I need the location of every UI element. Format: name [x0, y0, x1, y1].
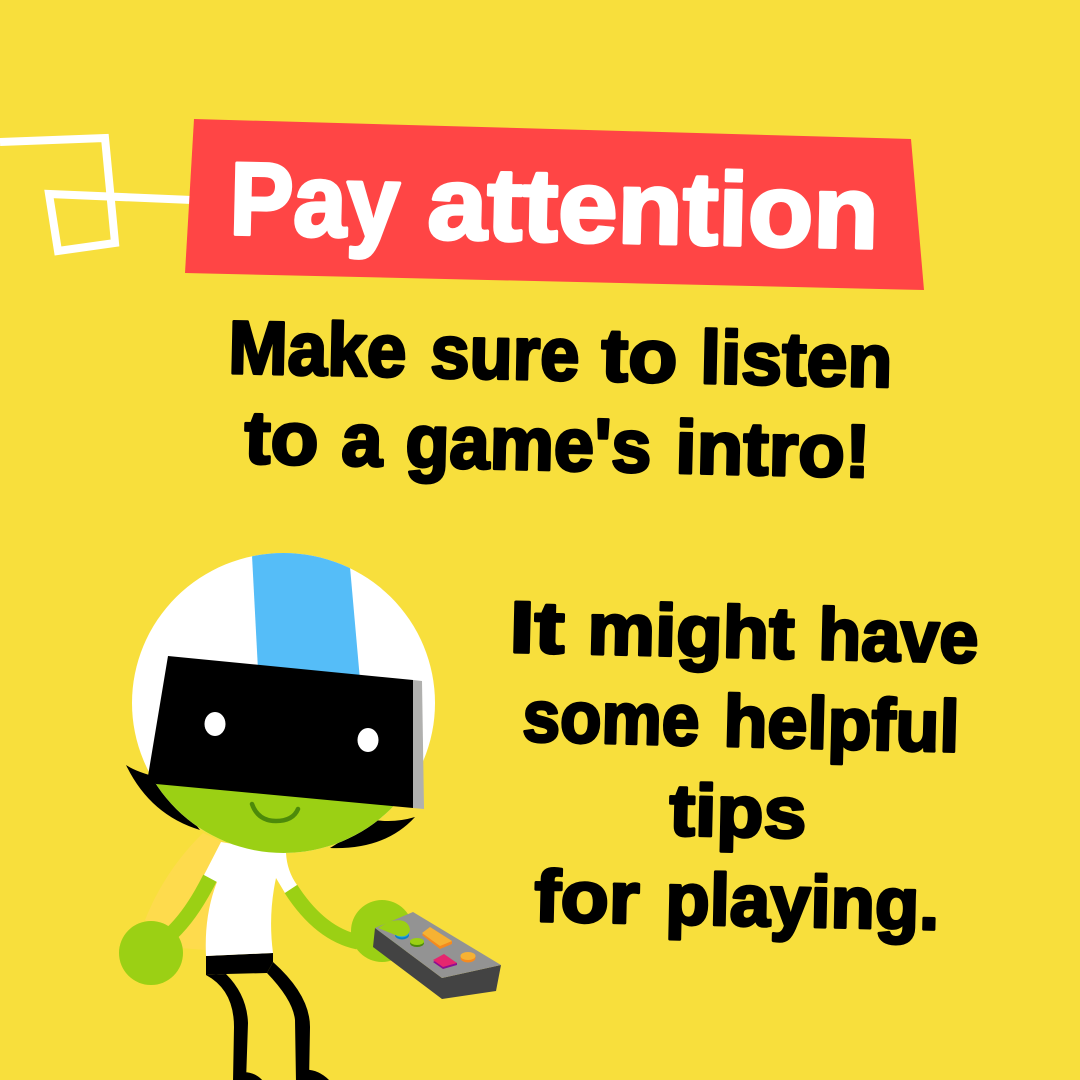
visor edge	[413, 680, 424, 809]
text block: helpful tips: have	[818, 594, 979, 679]
shirt	[204, 842, 297, 956]
title banner	[185, 119, 924, 290]
text block: listen to intro: Make	[228, 305, 407, 393]
text block: helpful tips: some	[522, 676, 701, 761]
character illustration	[119, 552, 501, 1080]
face	[156, 784, 394, 853]
text block: helpful tips: for	[534, 856, 640, 939]
helmet	[132, 553, 435, 853]
text block: helpful tips	[509, 587, 979, 945]
text block: helpful tips: tips	[669, 770, 807, 854]
left arm and hand	[119, 878, 210, 985]
right arm and hand	[291, 889, 413, 962]
cape	[145, 833, 240, 950]
legs	[206, 962, 331, 1080]
text block: helpful tips: playing.	[665, 859, 940, 945]
text block: listen to intro: to	[601, 313, 678, 398]
shorts	[206, 953, 273, 975]
text block: helpful tips: helpful	[723, 681, 960, 768]
helmet stripe	[252, 552, 360, 680]
title text	[229, 141, 880, 270]
text block: listen to intro: to	[244, 395, 320, 481]
text block: helpful tips: It	[509, 587, 565, 669]
visor	[148, 656, 413, 808]
eyes	[204, 712, 378, 752]
text block: listen to intro	[228, 305, 893, 493]
text block: listen to intro: a	[341, 397, 385, 482]
text block: listen to intro: intro!	[675, 405, 871, 493]
text block: listen to intro: game's	[405, 399, 652, 488]
thumb	[378, 920, 410, 936]
decorative white line loop	[0, 138, 192, 251]
text block: helpful tips: might	[587, 589, 795, 674]
title text: attention	[426, 145, 880, 270]
text block: listen to intro: listen	[700, 315, 893, 403]
text block: listen to intro: sure	[430, 309, 580, 396]
hair	[126, 765, 415, 848]
title text: Pay	[229, 141, 401, 260]
game remote	[373, 912, 501, 999]
smile	[252, 804, 298, 821]
